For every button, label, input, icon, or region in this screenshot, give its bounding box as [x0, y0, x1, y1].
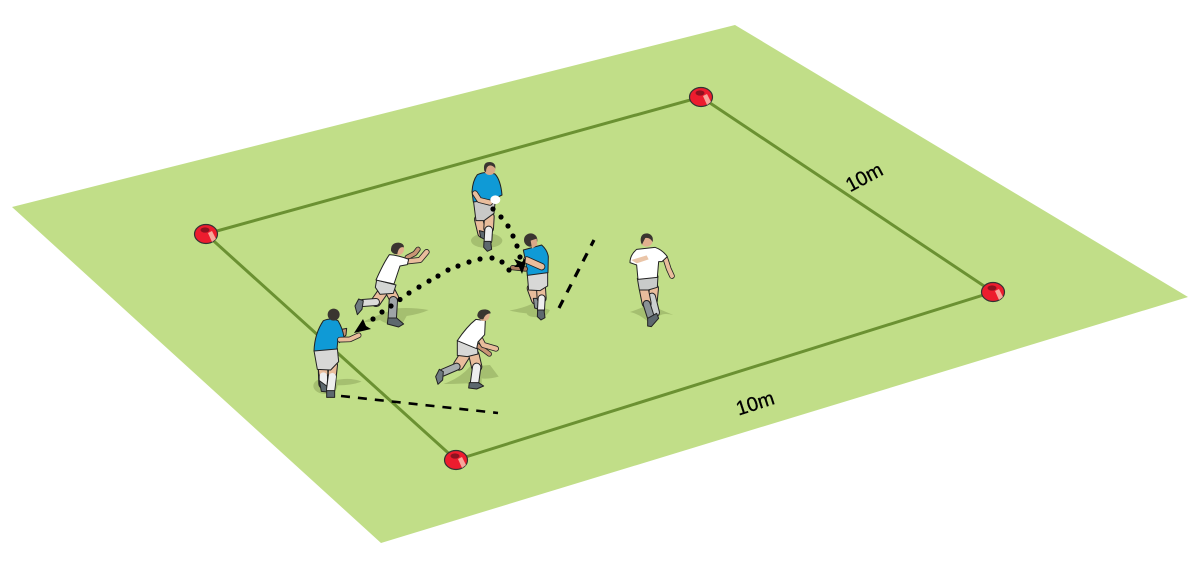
player: white support right: [630, 233, 673, 327]
player: white defender centre: [436, 309, 499, 389]
grid boundary lines: [206, 97, 993, 460]
dotted pass arc: left receiver: [370, 255, 512, 322]
dashed run line: bottom-left player: [341, 396, 498, 413]
dashed run line: centre player: [559, 240, 594, 308]
arrowhead: pass to centre player: [514, 257, 526, 274]
player: white defender left: [355, 243, 429, 327]
arrowhead: pass to left player: [354, 319, 371, 333]
cone: left: [194, 224, 218, 244]
label: 10m right side: 10m: [842, 159, 887, 197]
cone: top: [690, 88, 712, 106]
player: blue attacker left: [313, 309, 362, 397]
player: blue ball carrier top: [471, 162, 502, 251]
dotted pass line: top to centre player: [490, 206, 523, 260]
cone: bottom: [444, 450, 468, 470]
cone: right: [982, 282, 1004, 302]
label: 10m bottom side: 10m: [733, 387, 777, 420]
player: blue receiver centre: [509, 233, 550, 320]
